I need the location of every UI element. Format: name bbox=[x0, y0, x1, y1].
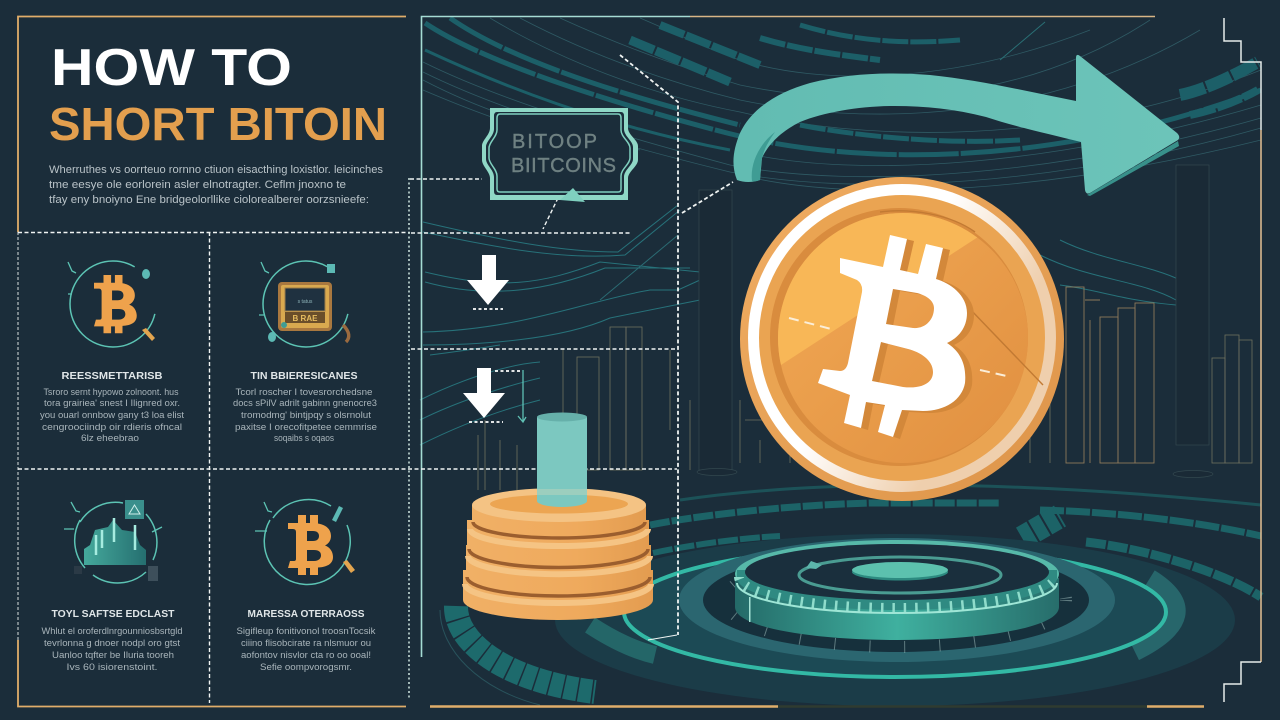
icon: device in ring bbox=[259, 261, 349, 347]
teal cylinder bbox=[537, 412, 587, 507]
intro text: tme eesye ole eorlorein asler elnotragter. Ceflm jnoxno te bbox=[49, 179, 346, 191]
card body: Sefie oompvorogsmr. bbox=[260, 662, 352, 672]
icon: device in ring: s tatus bbox=[298, 299, 313, 305]
arrow: down upper bbox=[467, 255, 509, 309]
background: circuit lines bbox=[420, 205, 1180, 445]
card: top left bbox=[40, 261, 185, 443]
card body bbox=[233, 387, 377, 443]
card: bottom left bbox=[42, 500, 182, 672]
title: SHORT BITOIN bbox=[49, 98, 387, 150]
frame: main panel border bbox=[422, 16, 1261, 706]
floor: concentric platform rings bbox=[555, 534, 1235, 706]
card body bbox=[42, 626, 182, 672]
large bitcoin coin bbox=[740, 177, 1064, 501]
background: top arcs bbox=[423, 18, 1261, 190]
card heading: TIN BBIERESICANES bbox=[250, 371, 358, 382]
card heading: MARESSA OTERRAOSS bbox=[248, 609, 365, 620]
coin bitcoin symbol bbox=[818, 235, 967, 437]
card body: Uanloo tqfter be Iluria tooreh bbox=[52, 650, 174, 660]
card body: you ouarl onnbow gany t3 loa elist bbox=[40, 410, 185, 420]
card body: Whlut el oroferdlnrgounniosbsrtgld bbox=[42, 626, 182, 636]
card: top right bbox=[233, 261, 377, 443]
card body: tevrlonna g dnoer nodpl oro gtst bbox=[44, 638, 181, 648]
card: bottom right bbox=[236, 500, 376, 672]
arrow: down lower bbox=[463, 368, 526, 422]
card body: ciiino flisobcirate ra nlsmuor ou bbox=[241, 638, 371, 648]
icon: bitcoin in ring bbox=[68, 261, 156, 347]
icon: candlestick chart in ring bbox=[64, 500, 162, 583]
card body: paxitse I orecofitpetee cemmrise bbox=[235, 422, 377, 432]
card body: tora grairiea' snest I Ilignred oxr. bbox=[44, 398, 180, 408]
curved arrow bbox=[733, 55, 1179, 196]
card body: Sigifleup fonitivonol troosnTocsik bbox=[236, 626, 376, 636]
icon: device in ring: B RAE bbox=[293, 314, 318, 323]
card body: Tsroro sernt hypowo zolnoont. hus bbox=[44, 387, 179, 397]
card body bbox=[40, 387, 185, 443]
intro text: Wherruthes vs oorrteuo rornno ctiuon eisacthing loxistlor. leicinches bbox=[49, 164, 384, 176]
floor: horizon and segment rows bbox=[440, 485, 1261, 705]
card body: docs sPilV adrilt gabinn gnenocre3 bbox=[233, 398, 377, 408]
coin bitcoin symbol shadow bbox=[825, 237, 974, 439]
title bbox=[49, 39, 387, 150]
intro text bbox=[49, 164, 384, 206]
card body: Tcorl roscher I tovesrorchedsne bbox=[236, 387, 372, 397]
card body: soqaibs s oqaos bbox=[274, 433, 334, 443]
intro text: tfay eny bnoiyno Ene bridgeolorllike ciolorealberer oorzsnieefe: bbox=[49, 194, 369, 206]
badge: bitoop bitcoins: BITOOP bbox=[512, 131, 597, 153]
icon: bitcoin in ring bbox=[255, 500, 355, 584]
badge: bitoop bitcoins bbox=[482, 108, 638, 202]
card body: cengroociindp oir rdieris ofncal bbox=[42, 422, 182, 432]
coin stack bbox=[463, 412, 653, 620]
card body: tromodmg' bintjpqy s olsrnolut bbox=[241, 410, 372, 420]
central platform bbox=[735, 540, 1059, 640]
title: HOW TO bbox=[51, 39, 292, 97]
card heading: TOYL SAFTSE EDCLAST bbox=[52, 609, 174, 620]
badge: bitoop bitcoins: BIITCOINS bbox=[511, 155, 616, 177]
frame: left panel gold border bbox=[18, 16, 406, 706]
dashed connectors bbox=[18, 55, 733, 703]
card body: aofontov nisvlor cta ro oo ooal! bbox=[241, 650, 371, 660]
background: pillars bbox=[697, 165, 1213, 478]
card body bbox=[236, 626, 376, 672]
card heading: REESSMETTARISB bbox=[62, 371, 162, 382]
card body: Ivs 60 isiorenstoint. bbox=[66, 662, 158, 672]
background: skyline bars bbox=[1066, 287, 1154, 463]
card body: 6lz eheebrao bbox=[81, 433, 139, 443]
